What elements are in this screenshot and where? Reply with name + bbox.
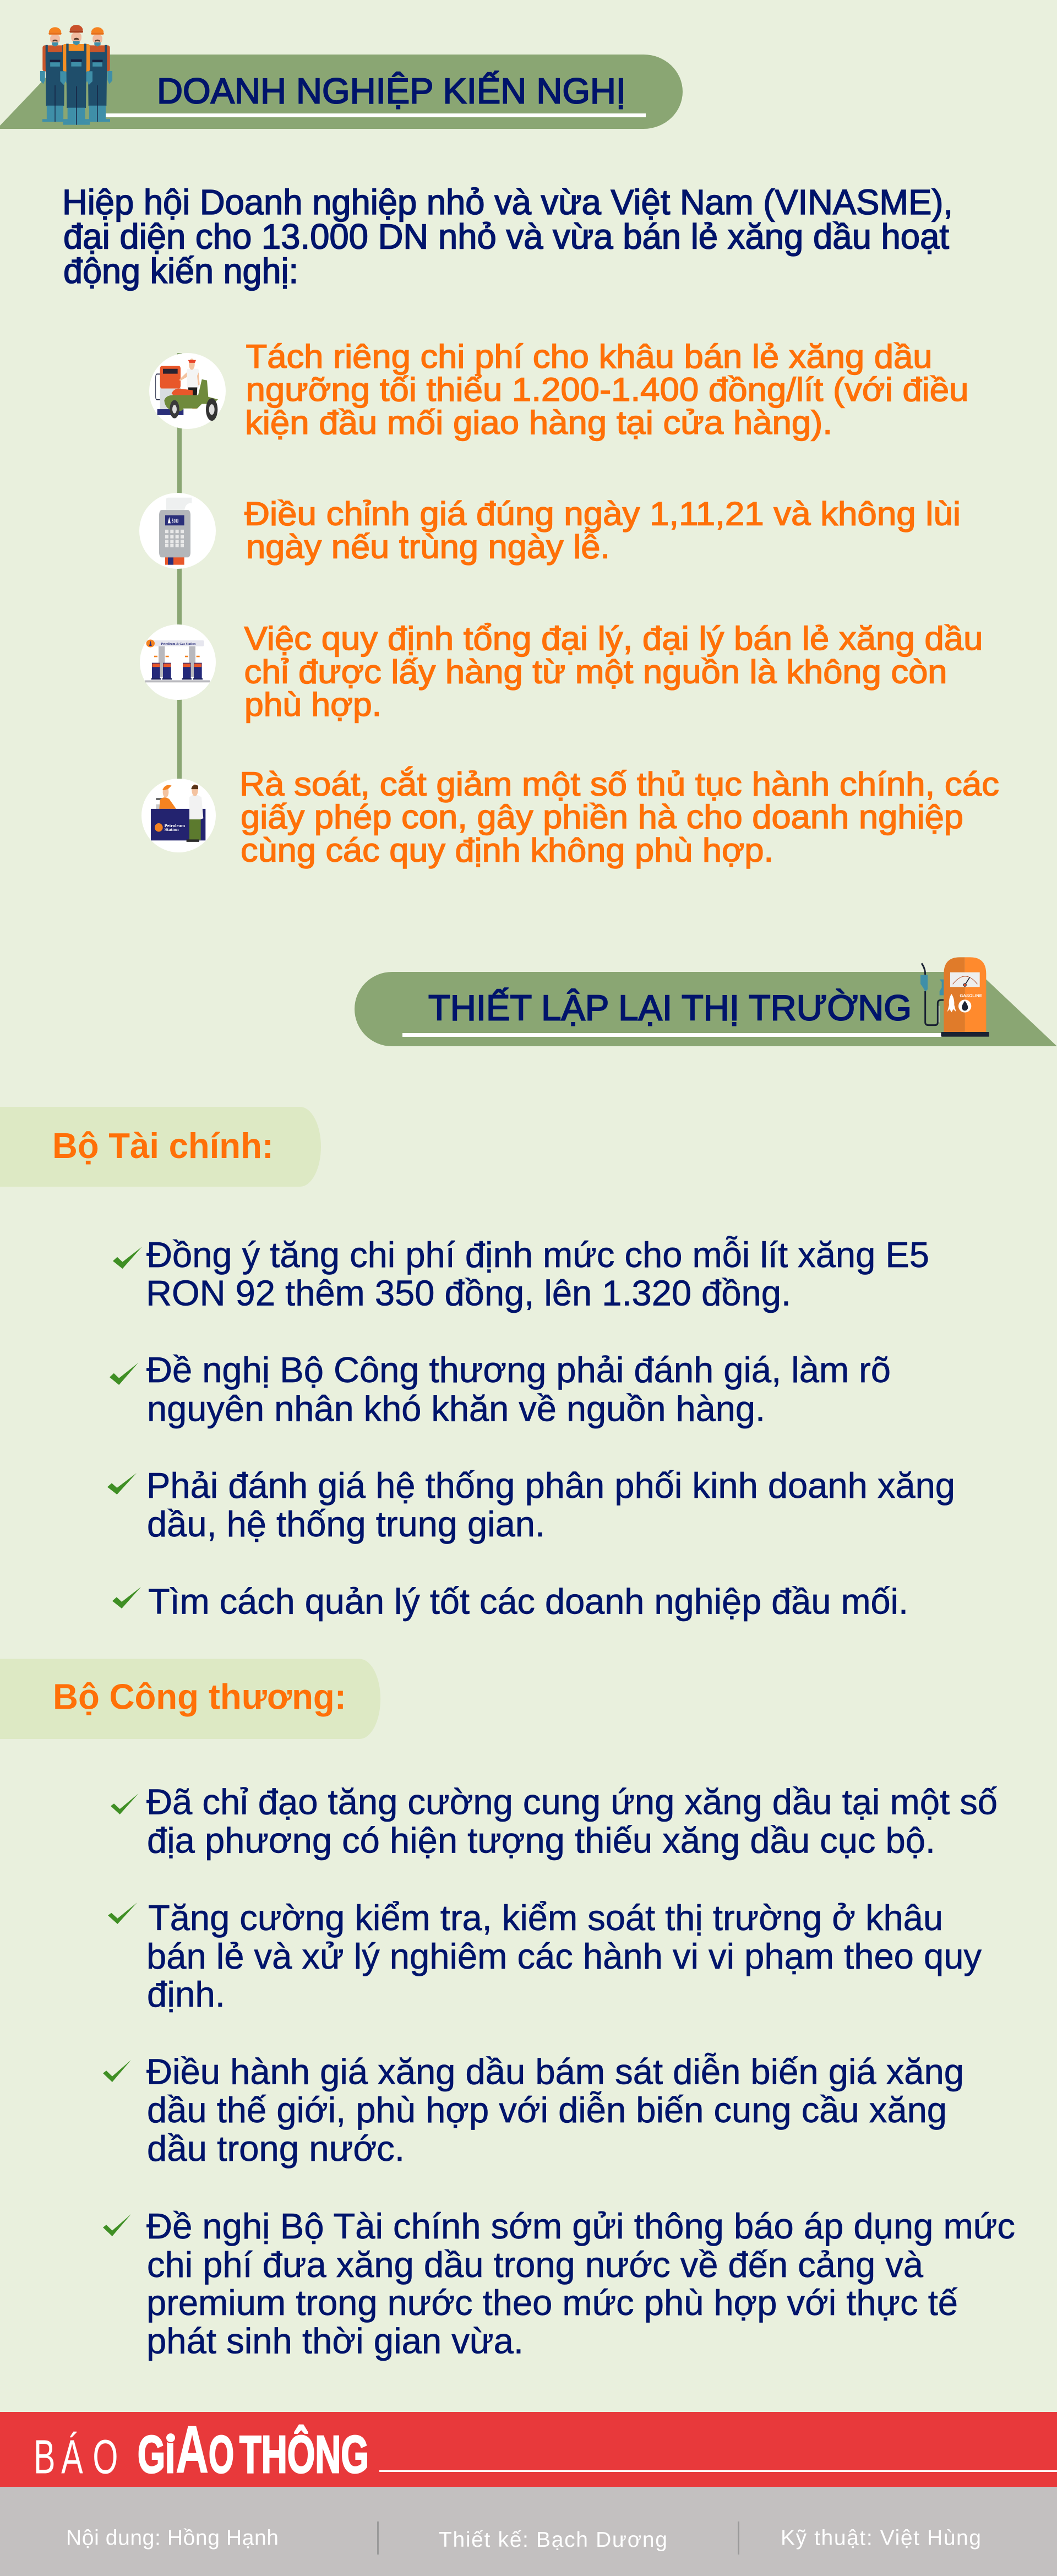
logo text: Giao Thông: A — [176, 2412, 209, 2487]
recommendation 4: cùng các quy định không phù hợp. — [241, 832, 773, 869]
logo text: Giao Thông — [138, 2412, 369, 2487]
list: orange recommendations — [239, 338, 999, 869]
logo text: Giao Thông: THÔNG — [239, 2425, 369, 2484]
footer: credits band — [0, 2487, 1057, 2576]
panel: Bộ Công thương — [0, 1659, 380, 1739]
banner: Thiết lập lại thị trường — [355, 972, 1057, 1046]
item 2: định. — [147, 1974, 225, 2014]
item 2: bán lẻ và xử lý nghiêm các hành vi vi phạm theo quy — [146, 1936, 982, 1976]
recommendation 3 — [244, 620, 983, 723]
logo text: Báo: BÁO — [34, 2430, 118, 2483]
icon: attendant and customer at counter: Petroleum — [165, 824, 186, 829]
item 2 — [108, 1898, 982, 2014]
item 3 — [107, 1465, 955, 1544]
credit: content: Nội dung: Hồng Hạnh — [66, 2526, 279, 2550]
item 3 — [103, 2052, 964, 2169]
item 3: dầu thế giới, phù hợp với diễn biến cung cầu xăng — [147, 2090, 947, 2130]
recommendation 3: phù hợp. — [244, 686, 382, 723]
list: Bộ Công thương items — [103, 1782, 1015, 2361]
icon: petroleum station — [140, 624, 216, 700]
recommendation 1: Tách riêng chi phí cho khâu bán lẻ xăng dầu — [246, 338, 933, 375]
item 2 — [110, 1350, 891, 1428]
item 4 — [103, 2206, 1015, 2361]
icon: gasoline pump — [920, 957, 989, 1037]
item 4: Đề nghị Bộ Tài chính sớm gửi thông báo áp dụng mức — [146, 2206, 1015, 2246]
banner: Doanh nghiệp kiến nghị — [0, 55, 683, 129]
heading: Bộ Công thương: Bộ Công thương: — [53, 1676, 346, 1717]
intro text: đại diện cho 13.000 DN nhỏ và vừa bán lẻ xăng dầu hoạt — [63, 217, 949, 257]
item 1: Đồng ý tăng chi phí định mức cho mỗi lít xăng E5 — [146, 1235, 929, 1275]
intro text: động kiến nghị: — [63, 251, 298, 291]
item 2: nguyên nhân khó khăn về nguồn hàng. — [147, 1389, 765, 1428]
heading: Doanh nghiệp kiến nghị: DOANH NGHIỆP KIẾN NGHỊ — [157, 70, 626, 111]
panel: Bộ Tài chính — [0, 1107, 321, 1187]
item 1 — [111, 1782, 998, 1860]
item 1: Đã chỉ đạo tăng cường cung ứng xăng dầu tại một số — [146, 1782, 998, 1822]
recommendation 3: chỉ được lấy hàng từ một nguồn là không còn — [244, 653, 947, 691]
logo text: Giao Thông: GI — [138, 2425, 175, 2484]
item 2: Đề nghị Bộ Công thương phải đánh giá, làm rõ — [146, 1350, 891, 1390]
icon: attendant and customer at counter — [141, 779, 216, 852]
recommendation 2: ngày nếu trùng ngày lễ. — [246, 529, 610, 565]
icon: scooter at fuel pump — [149, 353, 226, 429]
icon: attendant and customer at counter: Station — [165, 828, 179, 833]
item 4: premium trong nước theo mức phù hợp với thực tế — [146, 2282, 958, 2323]
credit: design: Thiết kế: Bạch Dương — [439, 2528, 667, 2552]
footer: Báo Giao Thông logo band — [0, 2412, 1057, 2487]
logo text: Giao Thông: O — [209, 2425, 234, 2484]
item 3: dầu trong nước. — [147, 2128, 405, 2169]
recommendation 1 — [245, 338, 969, 441]
recommendation 1: ngưỡng tối thiểu 1.200-1.400 đồng/lít (với điều — [246, 371, 969, 408]
item 2: Tăng cường kiểm tra, kiểm soát thị trường ở khâu — [148, 1898, 943, 1938]
intro text — [62, 182, 953, 291]
recommendation 4: Rà soát, cắt giảm một số thủ tục hành chính, các — [239, 765, 999, 803]
item 3: Phải đánh giá hệ thống phân phối kinh doanh xăng — [146, 1465, 955, 1506]
icon: payment terminal — [139, 493, 216, 569]
recommendation 2: Điều chỉnh giá đúng ngày 1,11,21 và không lùi — [244, 496, 961, 532]
intro text: Hiệp hội Doanh nghiệp nhỏ và vừa Việt Nam (VINASME), — [62, 182, 953, 222]
credit: technical: Kỹ thuật: Việt Hùng — [781, 2526, 981, 2550]
recommendation 4: giấy phép con, gây phiền hà cho doanh nghiệp — [241, 798, 963, 835]
item 1: RON 92 thêm 350 đồng, lên 1.320 đồng. — [146, 1273, 791, 1313]
item 3: dầu, hệ thống trung gian. — [147, 1504, 545, 1544]
heading: Bộ Tài chính: Bộ Tài chính: — [52, 1126, 274, 1166]
timeline connector — [177, 353, 182, 779]
icon: payment terminal: $100 — [172, 518, 179, 524]
recommendation 2 — [244, 496, 961, 565]
item 4: phát sinh thời gian vừa. — [146, 2320, 524, 2361]
item 4: chi phí đưa xăng dầu trong nước về đến cảng và — [147, 2245, 924, 2285]
item 1 — [113, 1235, 929, 1313]
list: Bộ Tài chính items — [107, 1235, 955, 1621]
icon: three workers — [40, 25, 112, 125]
icon: petroleum station: Petroleum & Gas Station — [161, 642, 196, 646]
item 3: Điều hành giá xăng dầu bám sát diễn biến giá xăng — [146, 2052, 964, 2091]
recommendation 3: Việc quy định tổng đại lý, đại lý bán lẻ xăng dầu — [244, 620, 983, 657]
item 4: Tìm cách quản lý tốt các doanh nghiệp đầu mối. — [148, 1582, 908, 1621]
item 1: địa phương có hiện tượng thiếu xăng dầu cục bộ. — [147, 1820, 935, 1860]
recommendation 4 — [239, 765, 999, 869]
recommendation 1: kiện đầu mối giao hàng tại cửa hàng). — [245, 404, 832, 441]
icon: gasoline pump: GASOLINE — [960, 993, 982, 998]
heading: Thiết lập lại thị trường: THIẾT LẬP LẠI THỊ TRƯỜNG — [428, 988, 912, 1028]
